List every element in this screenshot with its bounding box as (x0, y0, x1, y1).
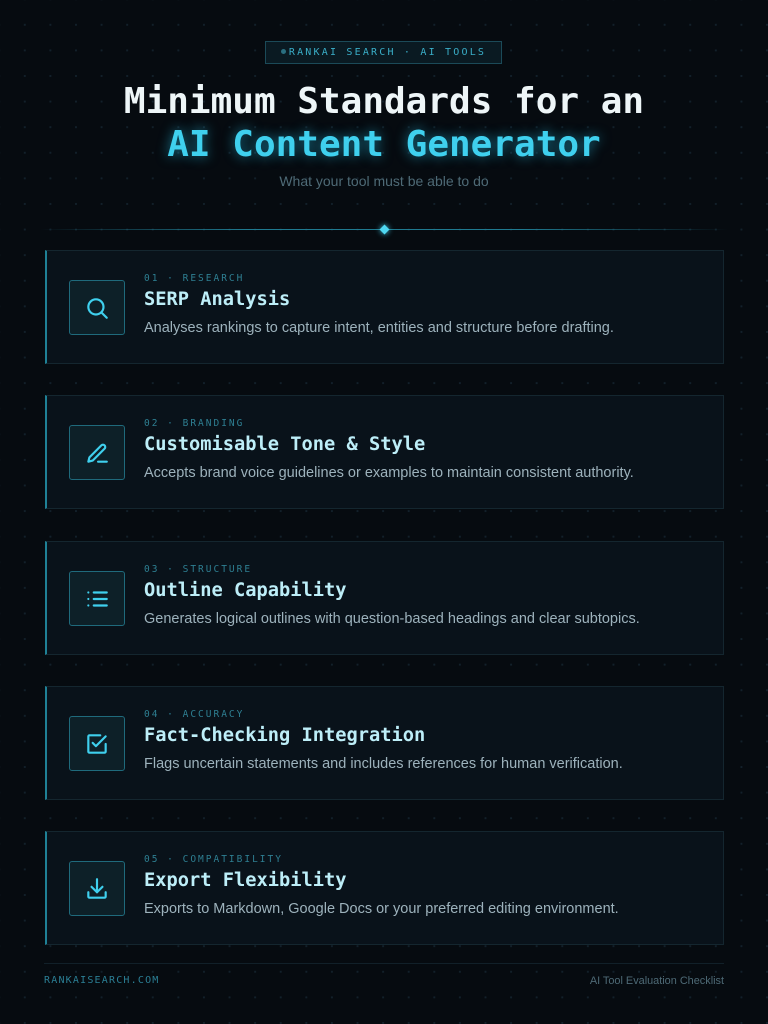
footer left: RANKAISEARCH.COM (44, 975, 160, 986)
card 5: Export (45, 831, 724, 945)
footer right: AI Tool Evaluation Checklist (590, 975, 724, 987)
card 3: Outline (45, 541, 724, 655)
heading: SERP Analysis (144, 289, 290, 310)
label: 02 · BRANDING (144, 418, 244, 429)
icon: checkbox (69, 716, 125, 771)
icon: download (69, 861, 125, 916)
label: 04 · ACCURACY (144, 709, 244, 720)
title: AI Content Generator (167, 124, 601, 165)
heading: Outline Capability (144, 580, 347, 601)
icon: list (69, 571, 125, 626)
heading: Export Flexibility (144, 870, 347, 891)
description: Flags uncertain statements and includes references for human verification. (144, 756, 623, 772)
icon: search (69, 280, 125, 335)
description: Accepts brand voice guidelines or examples to maintain consistent authority. (144, 465, 634, 481)
icon: pen (69, 425, 125, 480)
card 1: SERP Analysis (45, 250, 724, 364)
badge: RANKAI SEARCH · AI TOOLS (289, 47, 486, 58)
card 4: Fact-Checking (45, 686, 724, 800)
label: 01 · RESEARCH (144, 273, 244, 284)
label: 03 · STRUCTURE (144, 564, 252, 575)
description: Exports to Markdown, Google Docs or your preferred editing environment. (144, 901, 619, 917)
description: Analyses rankings to capture intent, entities and structure before drafting. (144, 320, 614, 336)
heading: Customisable Tone & Style (144, 434, 425, 455)
card 2: Tone & Style (45, 395, 724, 509)
subtitle: What your tool must be able to do (279, 173, 489, 189)
title: Minimum Standards for an (124, 81, 644, 122)
title (124, 81, 644, 165)
label: 05 · COMPATIBILITY (144, 854, 283, 865)
heading: Fact-Checking Integration (144, 725, 425, 746)
description: Generates logical outlines with question-based headings and clear subtopics. (144, 611, 640, 627)
badge (265, 41, 502, 64)
divider diamond (380, 225, 389, 234)
